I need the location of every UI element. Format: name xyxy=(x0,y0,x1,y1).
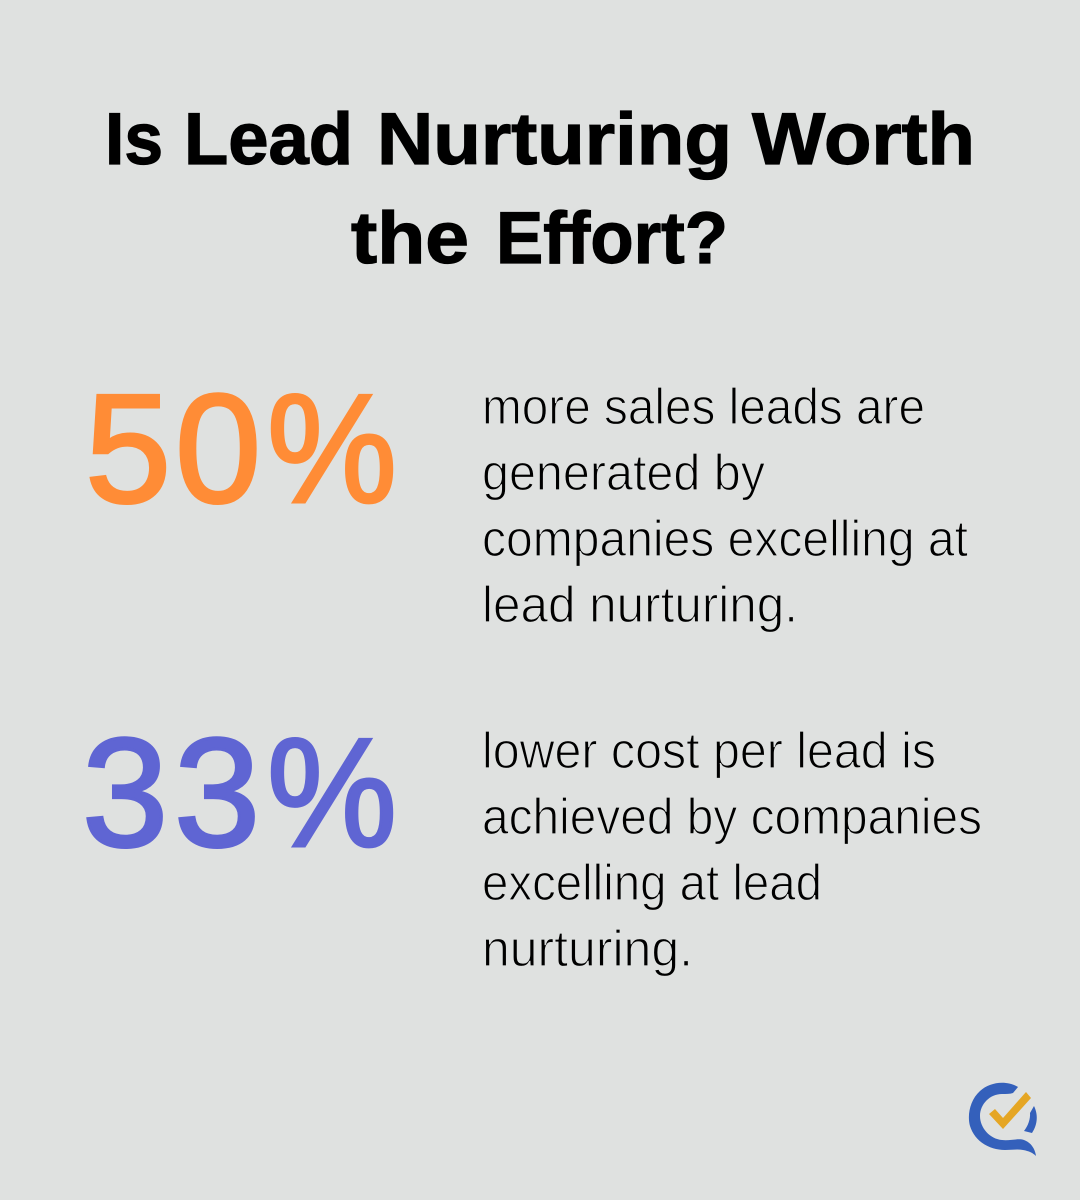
stat number: 50%: % xyxy=(267,362,397,535)
stat description: cost per lead: achieved by companies xyxy=(482,788,982,845)
stat description: sales leads: more sales leads are xyxy=(482,378,925,435)
stat description: sales leads xyxy=(482,378,968,633)
title: the xyxy=(351,198,469,279)
title: Lead xyxy=(184,99,353,180)
stat: 50% xyxy=(85,362,968,633)
title xyxy=(105,99,975,279)
stat number: 33% xyxy=(82,706,397,879)
icon: logo speech bubble with check mark xyxy=(969,1083,1037,1156)
title: Nurturing xyxy=(377,99,732,180)
stat description: cost per lead: nurturing. xyxy=(482,920,693,977)
stat description: sales leads: generated by xyxy=(482,444,765,501)
stat number: 33%: % xyxy=(267,706,397,879)
stat description: cost per lead: lower cost per lead is xyxy=(482,722,936,779)
stat description: cost per lead: excelling at lead xyxy=(482,854,822,911)
stat number: 50%: 50 xyxy=(85,362,261,535)
title: Worth xyxy=(752,99,975,180)
stat number: 50% xyxy=(85,362,397,535)
title: Effort? xyxy=(496,198,728,279)
stat description: sales leads: lead nurturing. xyxy=(482,576,798,633)
stat number: 33%: 33 xyxy=(82,706,260,879)
stat description: sales leads: companies excelling at xyxy=(482,510,968,567)
title: Is xyxy=(105,99,163,180)
stat: 33% xyxy=(82,706,982,977)
stat description: cost per lead xyxy=(482,722,982,977)
